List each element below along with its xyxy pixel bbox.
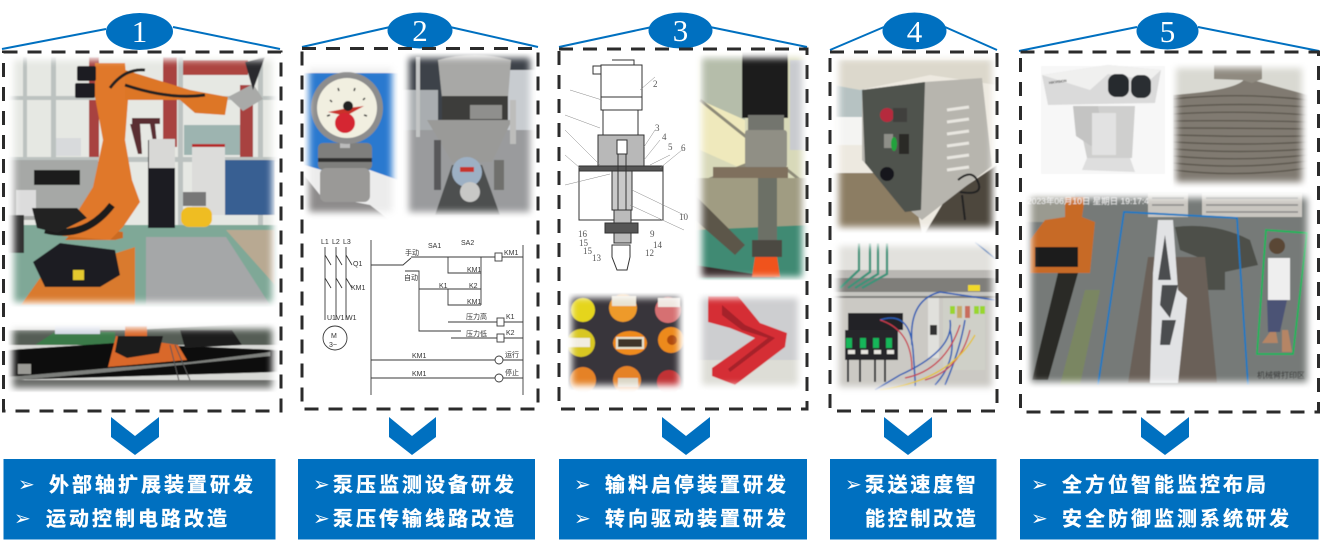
photo: concrete hopper with digital pressure gauge [402, 53, 536, 218]
circuit diagram [321, 239, 523, 395]
circuit labels: V1 [336, 315, 345, 322]
circuit labels: K1 [506, 314, 515, 321]
photo: surveillance camera [1041, 65, 1165, 174]
badge 4 [830, 12, 997, 50]
label box 3: ➢ [574, 472, 591, 496]
circuit labels: SA2 [461, 240, 474, 247]
photo: pressure gauge [304, 62, 398, 222]
badge 5: 5 [1160, 14, 1175, 49]
circuit labels: KM1 [467, 299, 482, 306]
label box 4: 能控制改造 [865, 508, 978, 530]
label box 3 [559, 459, 807, 540]
label box 5: ➢ [1031, 472, 1048, 496]
arrow 3 [662, 417, 710, 455]
badge 1: 1 [132, 14, 147, 49]
badge 2 [302, 12, 538, 48]
photo: monitoring view with detection boxes: 2023年06月10日 星期日 19:17:4 [1027, 196, 1149, 206]
label box 2: 泵压传输线路改造 [333, 508, 517, 530]
circuit labels: Q1 [353, 261, 362, 268]
dashed frame 2 [302, 48, 538, 409]
circuit labels [321, 239, 519, 378]
panel 1: robot and external axis [2, 13, 281, 540]
label box 1 [4, 459, 276, 540]
label box 5: 全方位智能监控布局 [1062, 472, 1269, 496]
label box 4: ➢ [845, 472, 862, 496]
photo: PLC electrical cabinet [833, 240, 997, 395]
photo: 3D printed nozzles [566, 293, 684, 394]
photo: printed concrete layers [1170, 62, 1308, 188]
circuit labels: 压力高 [466, 312, 487, 321]
badge 2: 2 [412, 13, 428, 48]
label box 5 [1020, 459, 1318, 540]
circuit labels: KM1 [467, 267, 482, 274]
label box 3: 转向驱动装置研发 [605, 508, 789, 530]
nozzle part numbers: 3 [655, 123, 660, 133]
panel 3: feed start/stop and steering [559, 12, 810, 540]
circuit labels: 自动 [404, 273, 418, 282]
circuit labels: L2 [332, 239, 340, 246]
nozzle part numbers: 16 [578, 229, 588, 239]
dashed frame 5 [1020, 52, 1318, 412]
label box 4 [830, 459, 996, 540]
circuit labels: 3~ [329, 342, 337, 349]
badge 1 [2, 13, 280, 50]
circuit labels: L1 [321, 239, 329, 246]
badge 3 [559, 12, 807, 48]
label box 1: 运动控制电路改造 [46, 508, 230, 530]
drawing: nozzle section [565, 60, 688, 270]
nozzle part numbers: 12 [645, 248, 654, 258]
label box 4: 泵送速度智 [865, 474, 978, 496]
nozzle part numbers: 14 [653, 240, 662, 250]
nozzle part numbers: 4 [662, 132, 667, 142]
arrow 2 [389, 417, 436, 455]
nozzle part numbers: 9 [650, 229, 655, 239]
photo: monitoring view with detection boxes [1025, 192, 1315, 388]
circuit labels: KM1 [351, 285, 366, 292]
photo: surveillance camera: HIKVISION [1049, 79, 1067, 85]
dashed frame 4 [830, 52, 997, 411]
nozzle part numbers: 15 [579, 238, 588, 248]
nozzle part numbers [578, 79, 688, 263]
photo: external axis rail [8, 322, 280, 392]
circuit labels: W1 [346, 315, 357, 322]
photo: feed valve mounted on robot [695, 52, 810, 280]
arrow 1 [111, 417, 159, 455]
photo: monitoring view with detection boxes: 机械臂打印区 [1257, 370, 1305, 380]
arrow 5 [1141, 417, 1189, 455]
circuit labels: KM1 [504, 250, 518, 257]
dashed frame 1 [4, 52, 281, 411]
circuit labels: SA1 [428, 243, 441, 250]
panel 5: intelligent monitoring [1019, 12, 1319, 540]
nozzle part numbers: 2 [653, 79, 658, 89]
label box 1: ➢ [18, 472, 35, 496]
arrow 4 [884, 417, 932, 455]
label box 1: ➢ [14, 506, 31, 530]
circuit labels: M [331, 333, 337, 340]
circuit labels: U1 [327, 315, 336, 322]
label box 2: ➢ [313, 472, 330, 496]
nozzle part numbers: 6 [681, 143, 686, 153]
nozzle part numbers: 5 [668, 142, 673, 152]
label box 2: ➢ [313, 506, 330, 530]
badge 3: 3 [673, 13, 688, 48]
dashed frame 3 [559, 49, 807, 409]
circuit labels: K1 [439, 283, 448, 290]
circuit labels: 运行 [505, 350, 519, 359]
label box 5: 安全防御监测系统研发 [1062, 506, 1292, 530]
nozzle part numbers: 15 [583, 246, 592, 256]
photo: KUKA robot arm [8, 55, 278, 307]
photo: red steering part [697, 293, 804, 390]
badge 5 [1019, 12, 1319, 51]
label box 3: 输料启停装置研发 [605, 472, 789, 496]
panel 4: pump speed control [830, 12, 997, 540]
photo: control box [833, 53, 997, 233]
label box 2: 泵压监测设备研发 [333, 474, 517, 496]
badge 4: 4 [907, 14, 923, 49]
circuit labels: K2 [506, 330, 515, 337]
label box 1: 外部轴扩展装置研发 [49, 474, 256, 496]
circuit labels: KM1 [412, 353, 426, 360]
circuit labels: L3 [343, 239, 351, 246]
circuit labels: KM1 [412, 371, 426, 378]
label box 2 [298, 459, 535, 540]
circuit labels: 停止 [505, 368, 519, 377]
circuit labels: 手动 [405, 248, 419, 257]
nozzle part numbers: 13 [592, 253, 602, 263]
circuit labels: K2 [469, 283, 478, 290]
panel 2: pump pressure [298, 12, 538, 540]
label box 5: ➢ [1031, 506, 1048, 530]
label box 3: ➢ [574, 506, 591, 530]
nozzle part numbers: 10 [679, 212, 688, 222]
circuit labels: 压力低 [466, 329, 487, 338]
